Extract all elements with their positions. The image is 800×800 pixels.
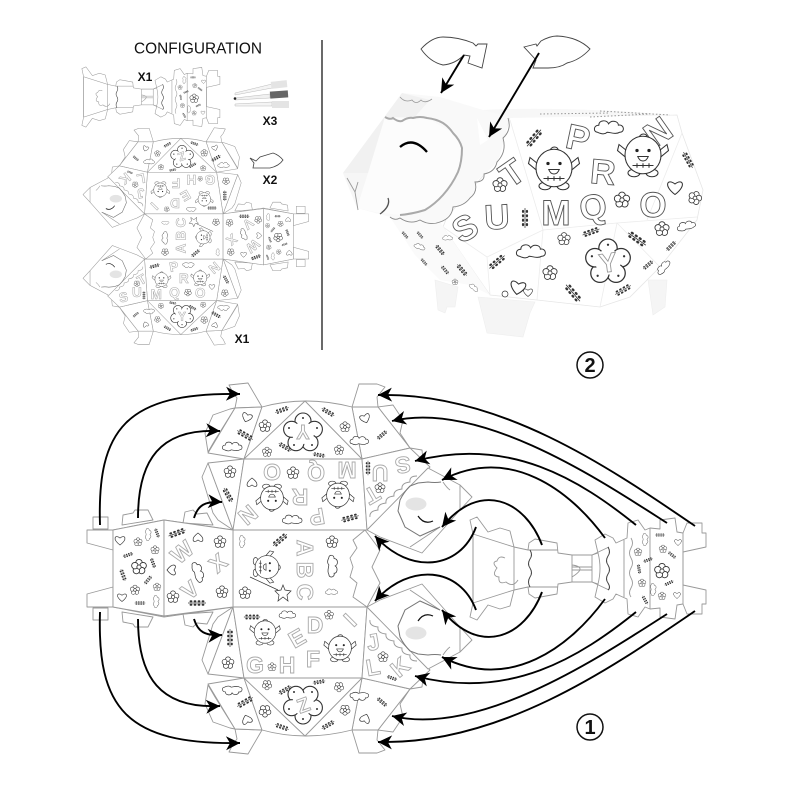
step number 1: 1: [584, 717, 596, 739]
body net letters: Y: [296, 420, 310, 442]
body net letters: E: [284, 623, 310, 653]
thumbnail letters: Z: [176, 149, 187, 163]
thumbnail letters: Y: [178, 311, 186, 324]
body net letters: V: [176, 575, 205, 605]
sheep letters: Q: [577, 186, 609, 229]
ear piece: left: [421, 37, 487, 68]
body net letters: X: [204, 548, 233, 578]
body net letters: Z: [294, 693, 313, 718]
assembly arrows: lower half: [100, 575, 695, 743]
body net letters: N: [233, 500, 263, 530]
thumbnail letters: L: [136, 170, 146, 187]
body net letters: G: [246, 652, 264, 678]
sheep body: [443, 115, 703, 307]
sheep letters: [445, 109, 680, 251]
speckled back: [483, 109, 677, 118]
sheep letters: S: [445, 206, 485, 251]
configuration: leg piece thumbnail: [82, 67, 220, 127]
sheep doodles: [487, 121, 703, 303]
thumbnail letters: H: [187, 172, 196, 187]
face outline: [385, 117, 462, 215]
thumbnail letters: E: [178, 187, 193, 204]
upper face shading: [343, 93, 430, 173]
body net letters: M: [337, 457, 357, 483]
body net letters: D: [307, 612, 323, 638]
sheep face: [357, 117, 462, 215]
thumbnail letters: V: [240, 215, 256, 232]
thumbnail letters: W: [243, 236, 263, 256]
sheep characters: [528, 147, 580, 190]
step number 1: [577, 714, 603, 740]
sheep letters: N: [637, 109, 680, 156]
thumbnail letters: I: [148, 200, 161, 213]
thumbnail letters: U: [132, 285, 142, 300]
arrow: left ear to head: [441, 55, 464, 93]
thumbnail letters: X: [223, 231, 240, 248]
quantity label: leg piece x1: X1: [138, 70, 153, 84]
sheep legs: [435, 280, 667, 337]
body net letters: J: [364, 628, 382, 656]
sheep eye: [400, 143, 427, 152]
sheep side doodles: [390, 217, 490, 295]
thumbnail letters: B: [174, 230, 189, 240]
body net letters: R: [291, 484, 308, 510]
sheep letters: M: [541, 194, 571, 233]
body net letters: H: [279, 652, 295, 678]
arrow: right ear to head: [489, 53, 539, 137]
thumbnail letters: R: [179, 271, 189, 286]
body net letters: K: [385, 651, 415, 682]
quantity label: ears x2: X2: [263, 173, 278, 187]
forehead wool curl: [400, 97, 432, 102]
thumbnail letters: C: [174, 218, 189, 228]
quantity label: markers x3: X3: [263, 114, 278, 128]
thumbnail letters: P: [168, 259, 180, 275]
muzzle shading: [343, 173, 368, 208]
body net letters: U: [372, 460, 388, 486]
body net letters: A: [292, 540, 318, 556]
ear piece: right: [524, 36, 590, 68]
thumbnail letters: Q: [169, 285, 180, 300]
body net letters: W: [165, 535, 199, 569]
big flower with Y: Y: [597, 247, 619, 279]
body net letters: I: [339, 609, 361, 631]
sheep letters: R: [589, 152, 617, 193]
main diagram: body net: [87, 383, 472, 754]
thumbnail letters: N: [206, 259, 223, 277]
thumbnail letters: [116, 149, 263, 324]
body net letters: F: [306, 646, 320, 672]
thumbnail letters: F: [172, 176, 180, 191]
sheep nose: [347, 178, 358, 210]
main diagram: leg piece: [470, 517, 706, 620]
illustration: assembled sheep: [343, 93, 703, 337]
big flower with Y: [586, 239, 630, 282]
ear slot: [477, 118, 488, 145]
body facet lines: [443, 120, 697, 307]
body net letters: Q: [307, 460, 325, 486]
thumbnail letters: J: [136, 185, 146, 201]
step number 2: [577, 352, 603, 378]
body net letters: S: [393, 451, 413, 479]
sheep wool edge: [390, 118, 509, 224]
divider line: [321, 40, 323, 350]
configuration: body net thumbnail: [83, 128, 309, 345]
icon: three markers: [234, 80, 289, 108]
body net letters: C: [292, 584, 318, 600]
sheep letters: O: [639, 186, 667, 225]
sheep mouth: [380, 198, 389, 214]
assembly arrows: upper half: [100, 394, 695, 562]
thumbnail letters: O: [195, 286, 205, 301]
icon: ear piece: [250, 153, 283, 168]
thumbnail letters: G: [205, 172, 215, 187]
thumbnail letters: D: [170, 196, 180, 211]
body net letters: T: [359, 480, 385, 510]
second character: [618, 134, 668, 177]
sheep head base: [343, 93, 510, 223]
thumbnail letters: T: [134, 271, 150, 288]
thumbnail letters: S: [118, 289, 129, 305]
body net letters: P: [307, 503, 327, 531]
body net letters: B: [292, 562, 318, 578]
quantity label: body net x1: X1: [235, 332, 250, 346]
thumbnail letters: A: [174, 243, 189, 253]
body net letters: O: [263, 459, 281, 485]
sheep letters: P: [562, 117, 593, 160]
sheep letters: U: [483, 197, 511, 238]
sheep letters: T: [492, 151, 532, 196]
step number 2: 2: [584, 355, 596, 377]
thumbnail letters: M: [151, 287, 162, 302]
thumbnail letters: K: [116, 170, 134, 188]
heading: configuration: CONFIGURATION: [134, 40, 262, 58]
body net letters: [165, 420, 415, 718]
body net letters: L: [364, 653, 382, 681]
